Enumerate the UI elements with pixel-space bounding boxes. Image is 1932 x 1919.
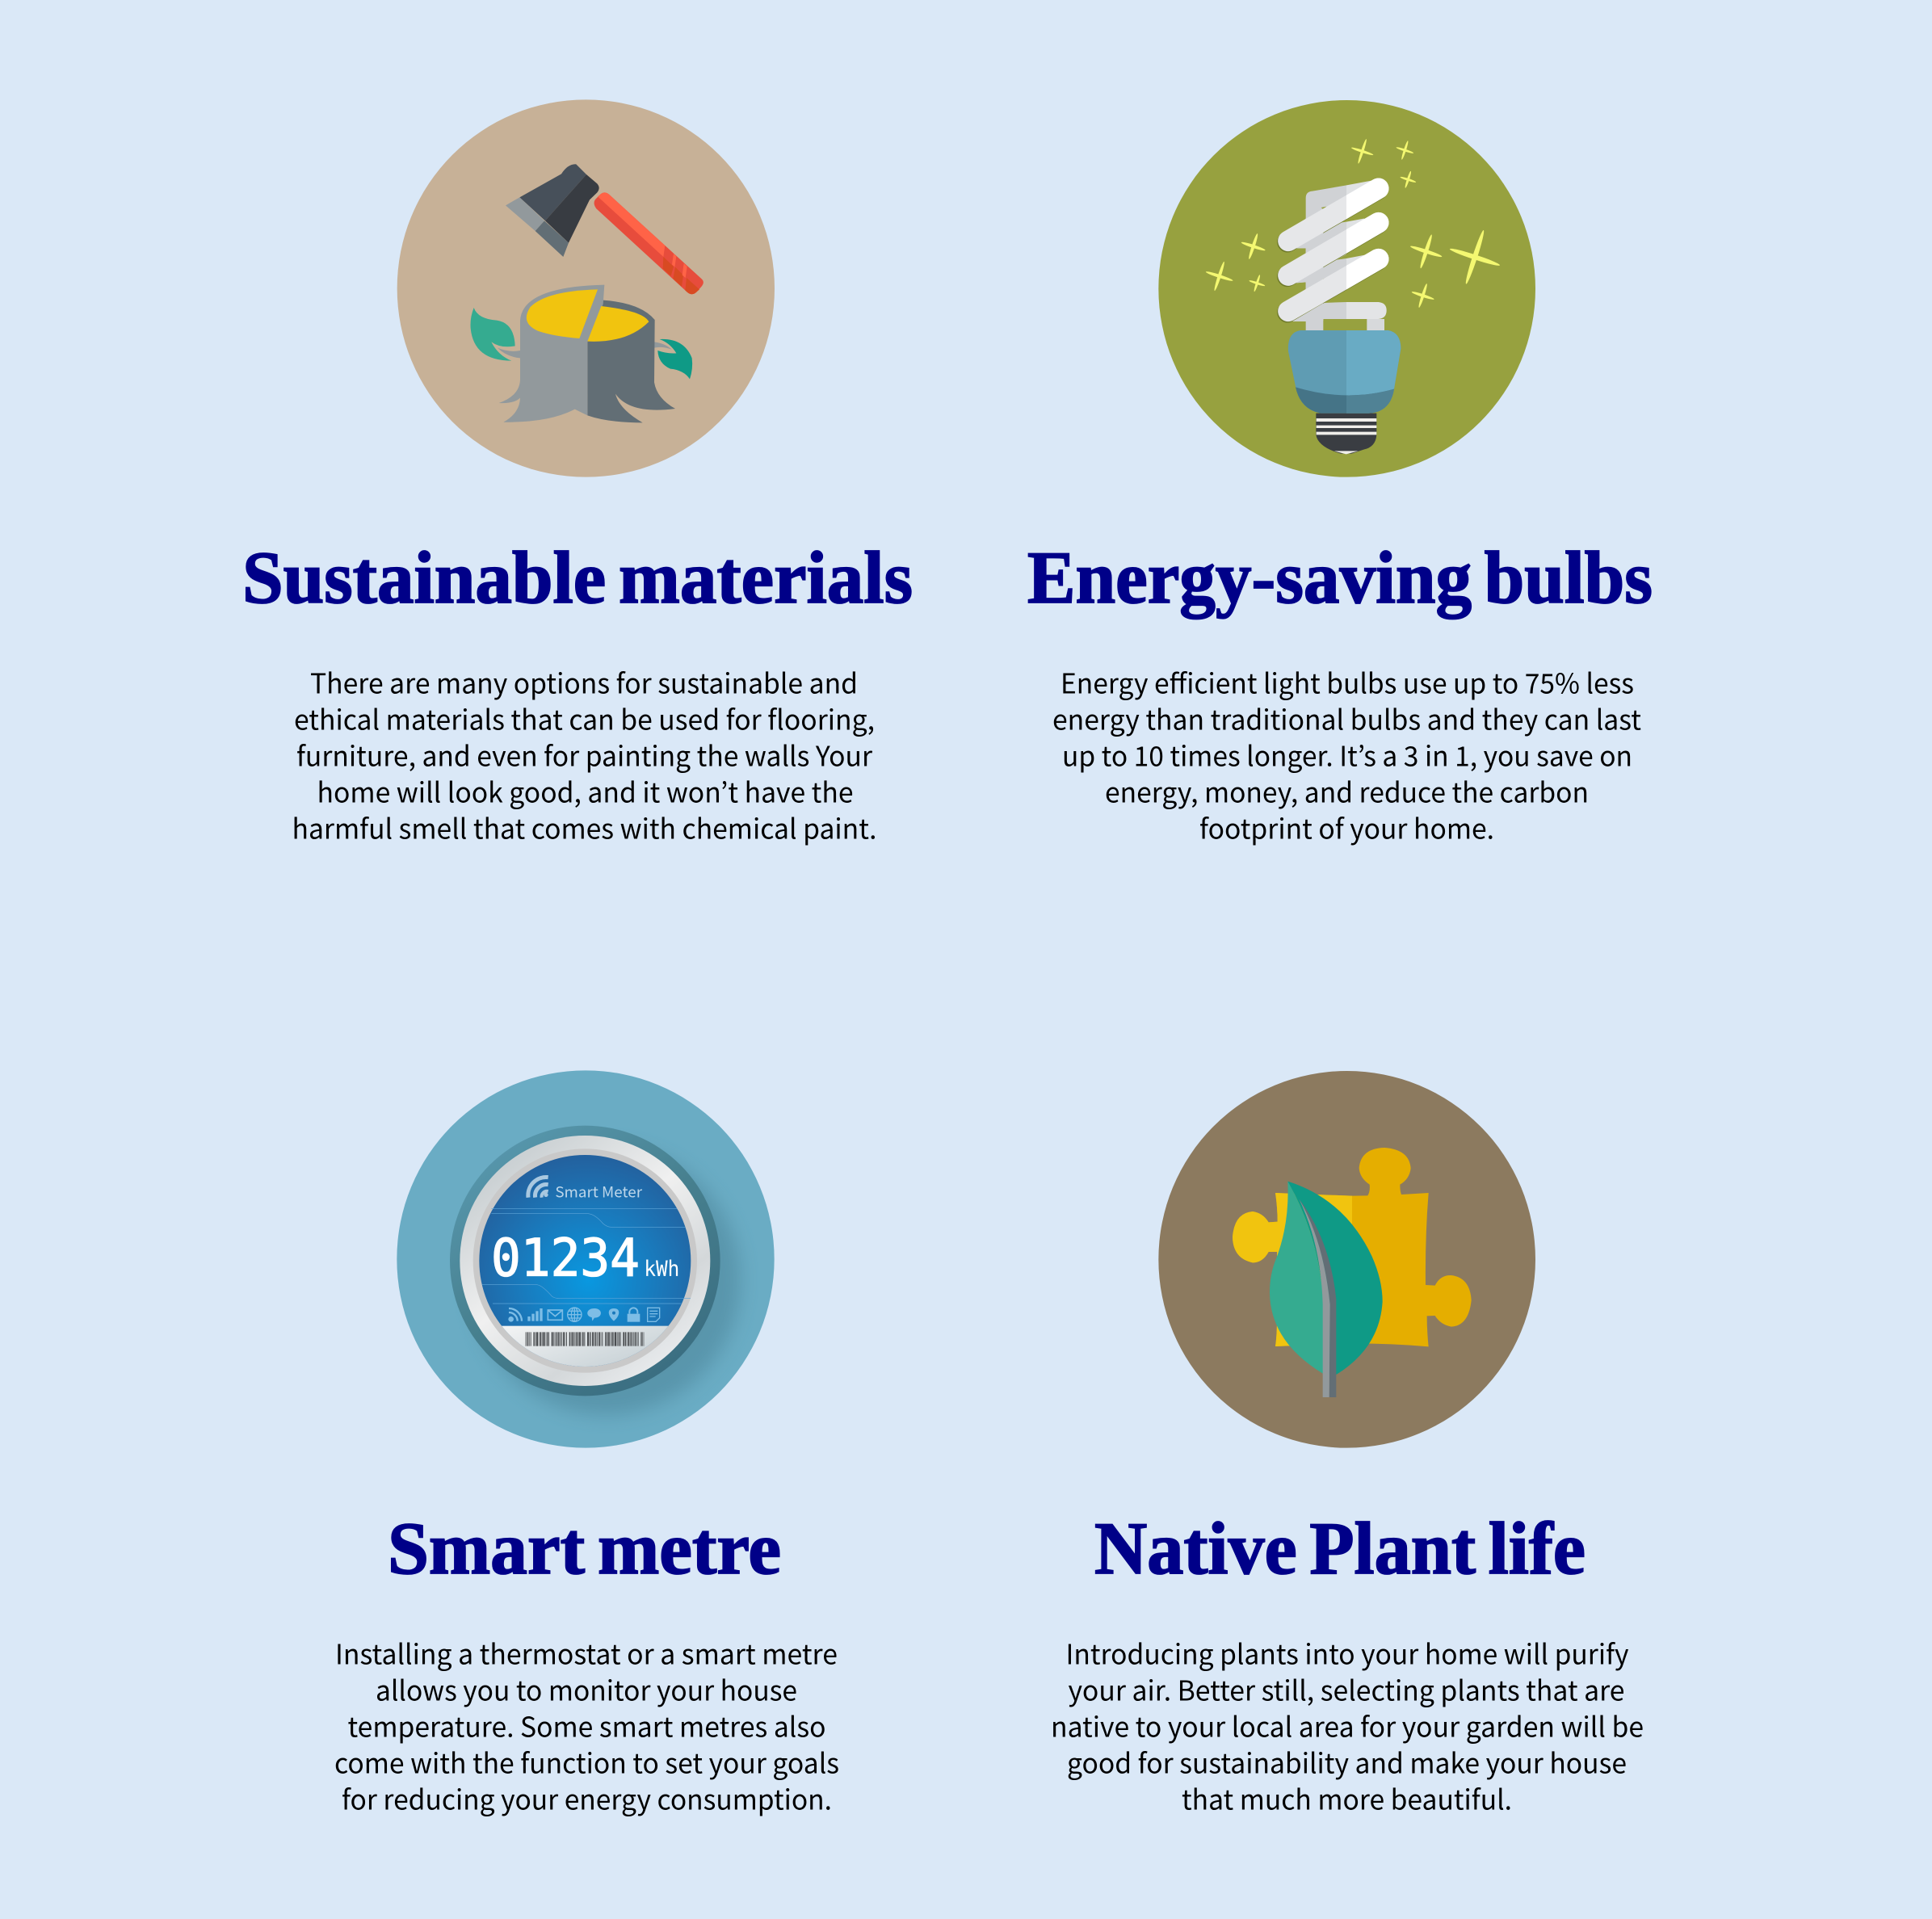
icon: smart meter display [397,1070,775,1448]
text: sustainable materials body: harmful smell that comes with chemical paint. [292,808,877,846]
text: energy-saving bulbs body: energy than traditional bulbs and they can last [1052,698,1641,738]
text: sustainable materials body: furniture, and even for painting the walls Your [296,735,873,774]
icon: leaf and puzzle piece [1158,1071,1535,1448]
text: native plant life body: that much more beautiful. [1182,1778,1512,1817]
text: sustainable materials body: There are many options for sustainable and [310,662,858,701]
heading: energy-saving bulbs: Energy-saving bulbs [1027,536,1653,619]
text: native plant life body: Introducing plants into your home will purify [1066,1633,1629,1672]
panel: native plant life [1051,1071,1644,1817]
icon: wifi signal [528,1178,548,1198]
icon: axe and tree stump [397,99,775,477]
heading: native plant life: Native Plant life [1094,1507,1586,1589]
text: native plant life body: your air. Better still, selecting plants that are [1068,1669,1625,1709]
panel: energy-saving bulbs [1027,100,1653,846]
text: native plant life body: good for sustainability and make your house [1067,1741,1627,1782]
heading: sustainable materials: Sustainable materials [242,536,913,619]
text: smart metre body: come with the function to set your goals [334,1741,839,1782]
text: native plant life body [1051,1633,1644,1817]
unit: kWh: kWh [644,1257,679,1282]
text: smart metre body: allows you to monitor your house [376,1669,797,1709]
back of tube, left side [1306,185,1346,331]
text: energy-saving bulbs body: footprint of your home. [1199,808,1494,846]
text: energy-saving bulbs body: energy, money, and reduce the carbon [1105,771,1589,811]
text: smart metre body: for reducing your energy consumption. [342,1778,832,1817]
text: sustainable materials body: ethical materials that can be used for flooring, [294,698,875,738]
reading: 01234: 01234 [491,1228,640,1288]
panel: smart metre [334,1070,839,1817]
text: smart metre body [334,1633,839,1817]
text: sustainable materials body: home will look good, and it won’t have the [317,771,853,811]
status icons row [508,1308,660,1322]
text: smart metre body: Installing a thermostat or a smart metre [335,1633,838,1672]
text: smart metre body: temperature. Some smart metres also [347,1706,825,1745]
heading: smart metre: Smart metre [388,1507,781,1589]
text: native plant life body: native to your local area for your garden will be [1051,1706,1644,1745]
icon: energy-saving bulb with sparkles [1158,100,1535,477]
label: smart meter: Smart Meter [555,1181,643,1203]
text: energy-saving bulbs body: Energy efficient light bulbs use up to 75% less [1060,662,1634,701]
panel: sustainable materials [242,99,913,847]
barcode [526,1318,644,1360]
text: sustainable materials body [292,662,877,846]
text: energy-saving bulbs body: up to 10 times longer. It’s a 3 in 1, you save on [1062,735,1632,774]
text: energy-saving bulbs body [1052,662,1641,846]
